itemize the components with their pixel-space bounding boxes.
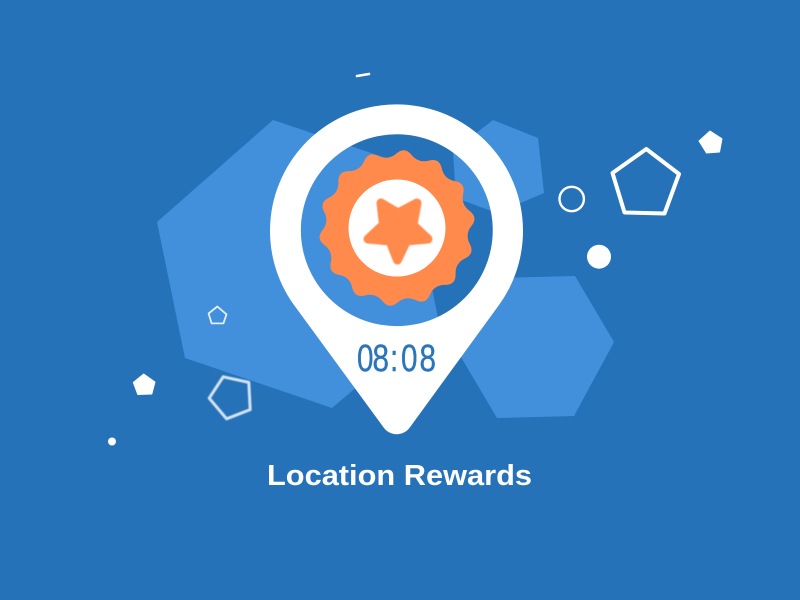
- white badge centre: [348, 180, 446, 276]
- location pin: [270, 104, 523, 434]
- small filled pentagon: left: [133, 374, 155, 394]
- reward badge: [320, 150, 474, 306]
- background hexagon: bottom right: [458, 276, 614, 418]
- title: Location Rewards: [267, 460, 532, 492]
- filled circle: [587, 245, 611, 269]
- blurred pentagon outline: [209, 377, 250, 419]
- digital clock: 08:08: [357, 338, 436, 380]
- small filled pentagon: top right: [699, 131, 722, 153]
- background hexagon: left: [157, 120, 438, 408]
- scalloped badge: [320, 150, 474, 306]
- star icon: [368, 203, 428, 260]
- small dot: [108, 438, 116, 446]
- circle outline: [560, 187, 584, 211]
- small pentagon outline: [209, 306, 226, 323]
- large pentagon outline: [612, 149, 679, 214]
- background hexagon: top right: [453, 120, 544, 213]
- decorative dash: [357, 74, 369, 76]
